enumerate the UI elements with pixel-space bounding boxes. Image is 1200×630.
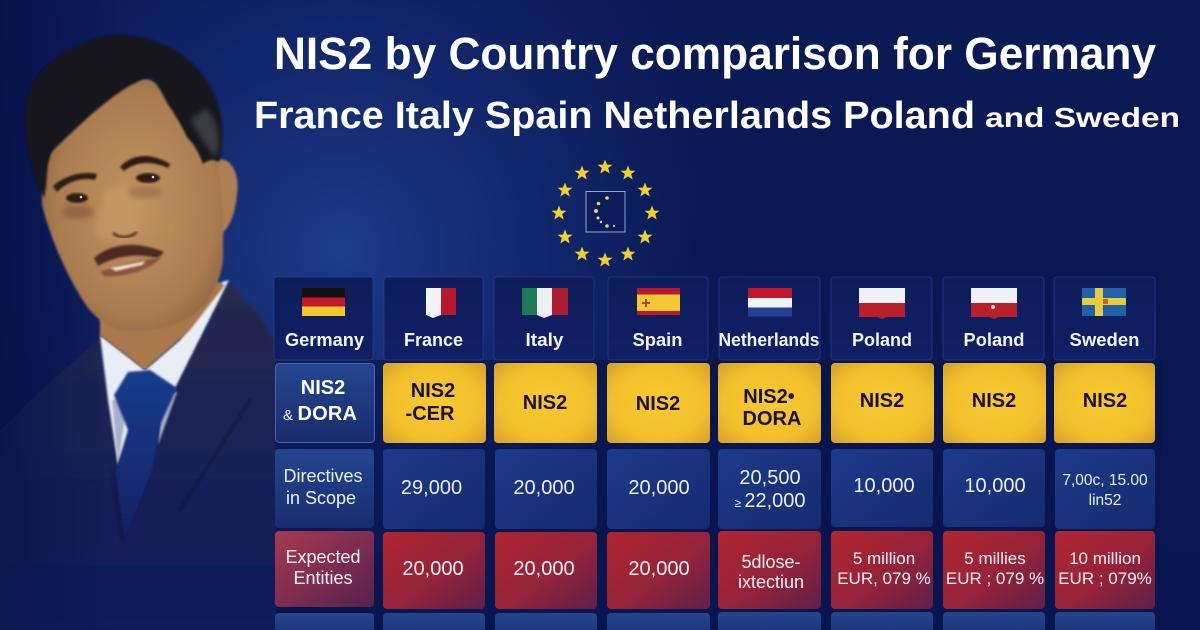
Spain penalty	[607, 532, 710, 609]
Netherlands value: ≥ 22,000	[734, 490, 806, 512]
Poland header (second)	[943, 277, 1044, 360]
Sweden value	[1055, 449, 1155, 529]
title line 1: NIS2 by Country comparison for Germany	[274, 28, 1156, 79]
Poland second penalty: EUR ; 079 %	[946, 569, 1044, 588]
neck	[100, 270, 225, 370]
Sweden penalty	[1055, 531, 1155, 609]
Sweden value: 7,00c, 15.00	[1062, 472, 1148, 489]
moustache and mouth	[94, 245, 164, 276]
Netherlands penalty: ixtectiun	[738, 572, 804, 592]
Germany header	[274, 277, 373, 360]
row label: Directives in Scope: Directives	[283, 466, 363, 486]
Netherlands penalty	[718, 531, 821, 609]
row label: NIS2 & DORA	[276, 364, 374, 442]
Italy header: Italy	[526, 330, 564, 350]
France value	[383, 449, 485, 529]
header row: countries	[274, 277, 1155, 360]
Spain header	[608, 277, 708, 360]
Netherlands: NIS2 DORA: NIS2•	[743, 386, 795, 408]
row label: NIS2 & DORA: & DORA	[283, 403, 357, 425]
necktie	[114, 370, 177, 540]
Germany header: Germany	[285, 330, 364, 350]
lapel shadow	[112, 400, 250, 540]
France penalty: 20,000	[402, 558, 464, 580]
Poland value	[831, 449, 933, 527]
Netherlands penalty: 5dlose-	[741, 552, 801, 572]
Spain value: 20,000	[628, 477, 690, 499]
Spain value	[607, 449, 710, 529]
Netherlands value: 20,500	[739, 467, 801, 489]
Italy: NIS2: NIS2	[523, 392, 567, 414]
Sweden header: Sweden	[1070, 330, 1140, 350]
France penalty	[383, 532, 485, 609]
eyes and brows	[53, 156, 170, 219]
hair highlight	[190, 108, 219, 158]
title line 2: France Italy Spain Netherlands Poland	[254, 95, 975, 137]
Poland second penalty	[943, 531, 1045, 609]
ear	[212, 159, 238, 233]
Netherlands header: Netherlands	[718, 330, 820, 350]
title line 2: and Sweden	[985, 102, 1180, 133]
Poland second: NIS2: NIS2	[972, 390, 1016, 412]
row: directives in scope	[275, 449, 1155, 529]
shirt collar	[100, 280, 229, 465]
comparison table	[274, 277, 1155, 630]
icon: EU stars emblem	[552, 160, 660, 266]
France header: France	[404, 330, 463, 350]
Netherlands: NIS2 DORA: DORA	[743, 408, 801, 430]
Poland: NIS2	[831, 363, 934, 443]
Spain penalty: 20,000	[628, 558, 690, 580]
Spain: NIS2: NIS2	[636, 393, 680, 415]
nose	[95, 185, 141, 240]
Poland second value	[943, 449, 1045, 527]
Sweden value: lin52	[1089, 492, 1121, 509]
Poland penalty	[831, 531, 933, 609]
row label: Expected Entities: Entities	[293, 568, 353, 588]
hair	[25, 35, 222, 198]
Poland: NIS2: NIS2	[860, 390, 904, 412]
France: NIS2-CER: -CER	[406, 403, 455, 425]
France header	[384, 277, 483, 360]
Italy value: 20,000	[513, 477, 575, 499]
Sweden header	[1054, 277, 1155, 360]
Spain: NIS2	[607, 363, 710, 443]
row: partially visible bottom row	[275, 612, 1155, 630]
title	[254, 28, 1180, 137]
Italy header	[494, 277, 594, 360]
row: expected entities	[275, 531, 1155, 609]
row label: Expected Entities: Expected	[285, 547, 361, 567]
Italy value	[495, 449, 597, 529]
France value: 29,000	[401, 477, 462, 499]
Poland second: NIS2	[943, 363, 1046, 443]
Sweden penalty: EUR ; 079%	[1058, 569, 1152, 588]
row label: Directives in Scope	[275, 449, 374, 528]
Netherlands header	[718, 277, 820, 360]
Poland header	[831, 277, 932, 360]
Sweden penalty: 10 million	[1069, 549, 1141, 568]
Italy: NIS2	[494, 363, 597, 443]
Poland penalty: EUR, 079 %	[837, 569, 931, 588]
Poland header: Poland	[852, 330, 912, 350]
row: NIS2 directives	[276, 363, 1155, 443]
Poland second penalty: 5 millies	[964, 549, 1026, 568]
Poland header (second): Poland	[964, 330, 1024, 350]
Poland penalty: 5 million	[853, 549, 915, 568]
Sweden: NIS2	[1054, 363, 1155, 443]
row label: Expected Entities	[275, 531, 374, 607]
Sweden: NIS2: NIS2	[1083, 390, 1127, 412]
Poland second value: 10,000	[964, 475, 1026, 497]
France: NIS2-CER	[383, 363, 486, 443]
Italy penalty	[495, 532, 597, 609]
France: NIS2-CER: NIS2	[411, 380, 455, 402]
Italy penalty: 20,000	[513, 558, 575, 580]
row label: Directives in Scope: in Scope	[286, 488, 356, 508]
Netherlands: NIS2 DORA	[718, 363, 821, 443]
row label: NIS2 & DORA: NIS2	[301, 377, 345, 399]
face	[42, 78, 223, 331]
suit jacket	[0, 282, 276, 630]
suit left shade	[0, 338, 110, 630]
portrait: man in suit	[0, 35, 276, 630]
Spain header: Spain	[632, 330, 682, 350]
Poland value: 10,000	[853, 475, 915, 497]
Netherlands value	[718, 449, 821, 529]
